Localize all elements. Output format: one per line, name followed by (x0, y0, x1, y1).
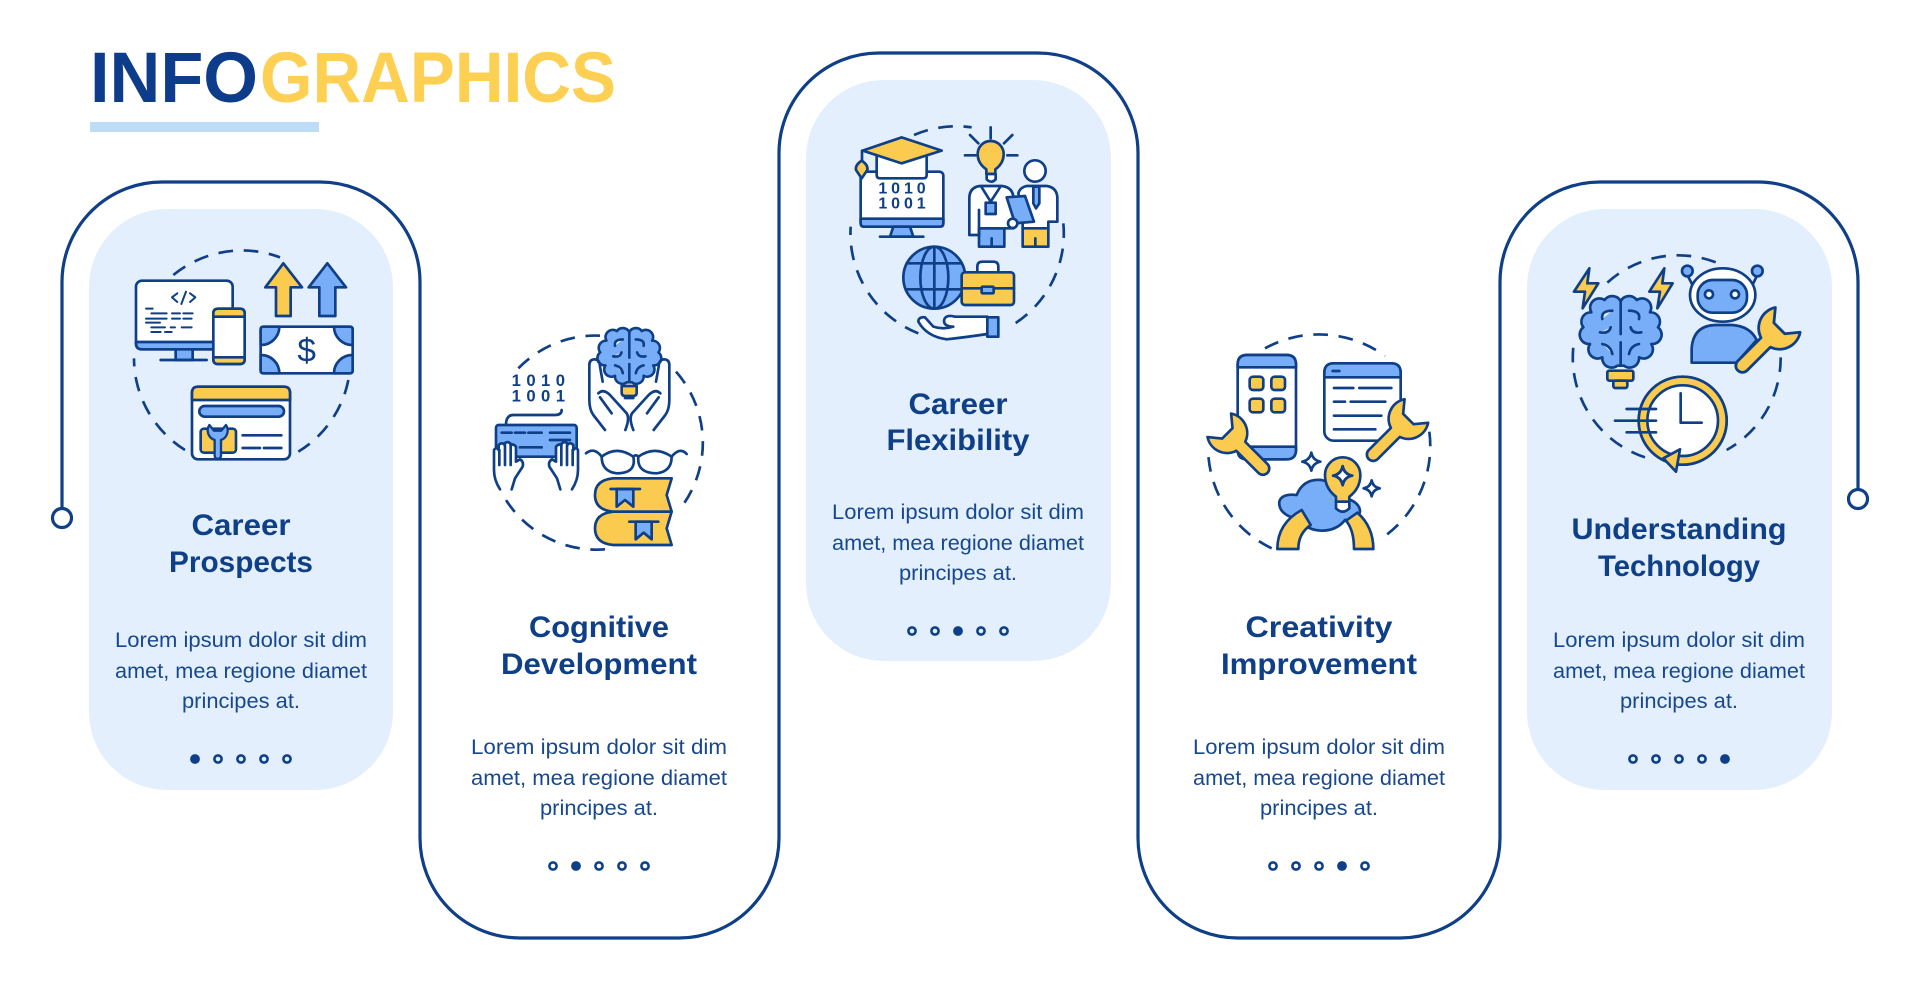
icon: understanding technology (1573, 255, 1803, 472)
icon: career flexibility: 1001 (878, 195, 926, 212)
icon: career flexibility: 1010 (878, 180, 926, 197)
panel: understanding technology (1527, 209, 1832, 790)
body text: amet, mea regione diamet (832, 531, 1084, 555)
icon: creativity improvement (1205, 334, 1431, 549)
panel: creativity improvement (1193, 334, 1445, 870)
heading (1221, 611, 1417, 681)
panel background (89, 209, 393, 790)
body text: principes at. (182, 689, 300, 713)
icon: career flexibility (850, 126, 1064, 339)
panel background (806, 80, 1111, 661)
heading: Understanding (1572, 513, 1786, 546)
pagination dots (908, 627, 1008, 635)
body text: amet, mea regione diamet (471, 766, 727, 790)
panel: cognitive development (471, 328, 727, 870)
icon: career prospects (134, 250, 353, 459)
icon: career prospects: $ (297, 333, 316, 370)
heading: Prospects (169, 546, 313, 579)
pagination dots (1269, 862, 1369, 870)
icon: cognitive development (494, 328, 703, 550)
heading: Creativity (1246, 611, 1393, 644)
body text: Lorem ipsum dolor sit dim (1193, 735, 1445, 759)
heading: Flexibility (886, 424, 1030, 457)
heading: Improvement (1221, 648, 1417, 681)
body text: Lorem ipsum dolor sit dim (1553, 628, 1805, 652)
body text: amet, mea regione diamet (1193, 766, 1445, 790)
body text (1553, 628, 1805, 713)
body text: principes at. (1620, 689, 1738, 713)
body text: Lorem ipsum dolor sit dim (115, 628, 367, 652)
heading: Development (501, 648, 697, 681)
title underline (90, 122, 319, 132)
pagination dots (191, 755, 291, 763)
body text (1193, 735, 1445, 820)
title (90, 39, 616, 118)
heading: Career (192, 509, 291, 542)
icon: cognitive development: 1001 (512, 387, 565, 406)
heading (886, 388, 1030, 457)
heading (501, 611, 697, 681)
body text: principes at. (899, 561, 1017, 585)
body text (471, 735, 727, 820)
heading: Cognitive (529, 611, 669, 644)
panel: career prospects (89, 209, 393, 790)
body text: Lorem ipsum dolor sit dim (832, 500, 1084, 524)
body text (832, 500, 1084, 585)
heading: Career (908, 388, 1008, 421)
title: INFO (90, 39, 258, 118)
pagination dots (549, 862, 649, 870)
body text (115, 628, 367, 713)
panel background (1527, 209, 1832, 790)
icon: cognitive development: 1010 (512, 371, 565, 390)
body text: amet, mea regione diamet (1553, 659, 1805, 683)
pagination dots (1629, 755, 1729, 763)
body text: principes at. (1260, 796, 1378, 820)
panel: career flexibility (806, 80, 1111, 661)
body text: Lorem ipsum dolor sit dim (471, 735, 727, 759)
heading (169, 509, 313, 579)
heading (1572, 513, 1786, 583)
body text: amet, mea regione diamet (115, 659, 367, 683)
title: GRAPHICS (260, 39, 616, 118)
body text: principes at. (540, 796, 658, 820)
heading: Technology (1598, 550, 1761, 583)
